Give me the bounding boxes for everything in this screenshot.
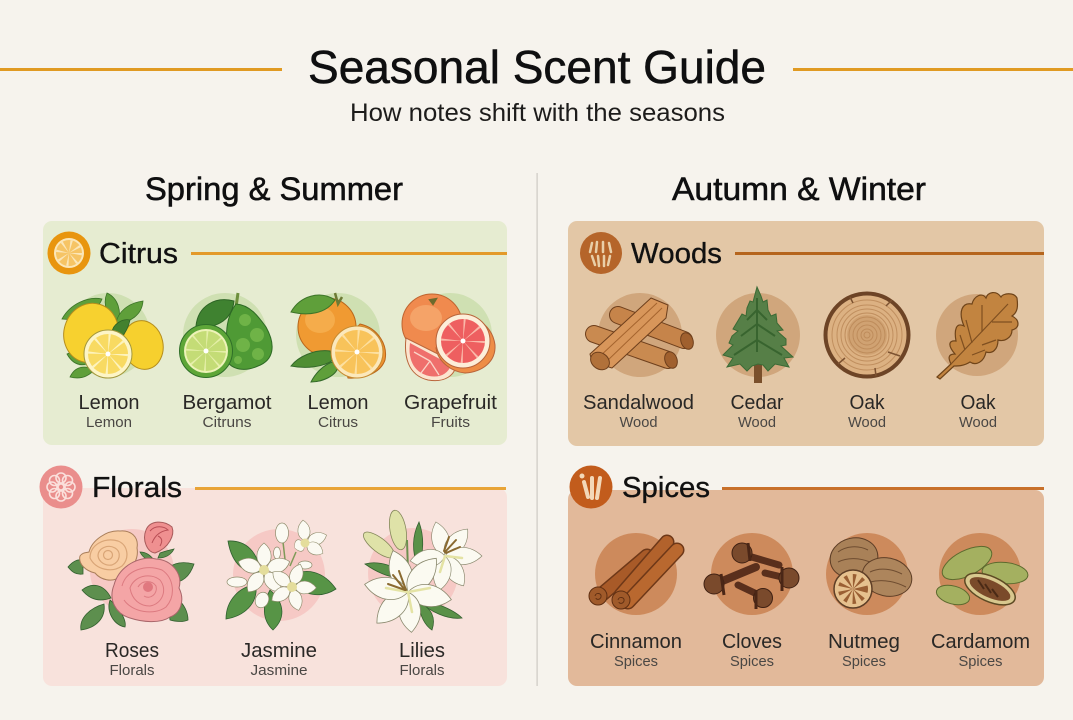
label: Nutmeg: Spices	[842, 654, 886, 670]
label: Nutmeg	[828, 631, 900, 670]
label: Lilies	[399, 640, 445, 679]
item: cloves	[704, 533, 799, 615]
label: Oak (second): Oak	[960, 392, 996, 414]
label: Sandalwood: Sandalwood	[583, 392, 694, 414]
icon: wood sticks	[580, 232, 622, 274]
label: Lilies: Lilies	[399, 640, 445, 662]
label: Cardamom: Cardamom	[931, 631, 1030, 653]
category heading: Citrus: Citrus	[99, 238, 178, 270]
label: Jasmine: Jasmine	[241, 640, 317, 662]
label: Oak (second): Wood	[959, 415, 997, 431]
item: lilies	[360, 509, 482, 633]
title: Seasonal Scent Guide	[308, 41, 766, 93]
label: Bergamot: Citruns	[202, 415, 252, 431]
item: sandalwood	[587, 293, 696, 377]
label: Lilies: Florals	[400, 663, 444, 679]
panel: citrus	[43, 221, 507, 445]
label: Roses	[105, 640, 159, 679]
heading: Spring & Summer: Spring & Summer	[145, 171, 403, 207]
label: Roses: Florals	[110, 663, 154, 679]
item: roses	[68, 522, 194, 630]
heading: Autumn & Winter: Autumn & Winter	[672, 171, 926, 207]
panel: florals	[40, 466, 507, 686]
label: Jasmine: Jasmine	[250, 663, 308, 679]
panel: woods	[568, 221, 1044, 446]
label: Lemon (second): Lemon	[308, 392, 368, 414]
panel: spices	[568, 466, 1044, 686]
label: Cedar	[730, 392, 784, 431]
label: Lemon (second)	[308, 392, 368, 431]
item: oak log section	[826, 294, 908, 376]
label: Bergamot	[182, 392, 272, 431]
label: Oak: Wood	[848, 415, 886, 431]
item: cardamom	[934, 533, 1029, 615]
label: Cardamom: Spices	[958, 654, 1002, 670]
item: jasmine	[226, 520, 336, 630]
item: nutmeg	[826, 533, 915, 615]
item: grapefruit	[402, 293, 495, 381]
label: Cloves: Spices	[730, 654, 774, 670]
label: Jasmine	[241, 640, 317, 679]
category heading: Spices: Spices	[622, 472, 710, 504]
category heading: Woods: Woods	[631, 238, 722, 270]
label: Cedar: Cedar	[730, 392, 784, 414]
icon: flower	[40, 466, 82, 508]
item: bergamot	[180, 293, 272, 378]
label: Roses: Roses	[105, 640, 159, 662]
label: Cinnamon: Cinnamon	[590, 631, 682, 653]
label: Sandalwood	[583, 392, 694, 431]
label: Cloves	[722, 631, 782, 670]
label: Cedar: Wood	[738, 415, 776, 431]
label: Grapefruit: Fruits	[431, 415, 470, 431]
label: Lemon: Lemon	[78, 392, 140, 414]
label: Sandalwood: Wood	[620, 415, 658, 431]
label: Cloves: Cloves	[722, 631, 782, 653]
label: Lemon: Lemon	[86, 415, 132, 431]
label: Oak: Oak	[850, 392, 885, 414]
label: Grapefruit	[404, 392, 497, 431]
item: orange	[291, 293, 386, 382]
label: Bergamot: Bergamot	[182, 392, 272, 414]
category heading: Florals: Florals	[92, 472, 182, 504]
label: Lemon	[78, 392, 140, 431]
label: Grapefruit: Grapefruit	[404, 392, 497, 414]
icon: spice sticks	[570, 466, 612, 508]
item: cinnamon	[589, 533, 677, 615]
label: Nutmeg: Nutmeg	[828, 631, 900, 653]
item: cedar	[716, 287, 800, 383]
label: Lemon (second): Citrus	[318, 415, 358, 431]
icon: citrus slice	[48, 232, 90, 274]
label: Cinnamon	[590, 631, 682, 670]
label: Oak	[848, 392, 886, 431]
label: Oak (second)	[959, 392, 997, 431]
label: Cinnamon: Spices	[614, 654, 658, 670]
label: Cardamom	[931, 631, 1030, 670]
subtitle: How notes shift with the seasons	[350, 99, 725, 127]
item: oak leaf	[936, 293, 1018, 379]
item: lemon	[56, 293, 168, 378]
